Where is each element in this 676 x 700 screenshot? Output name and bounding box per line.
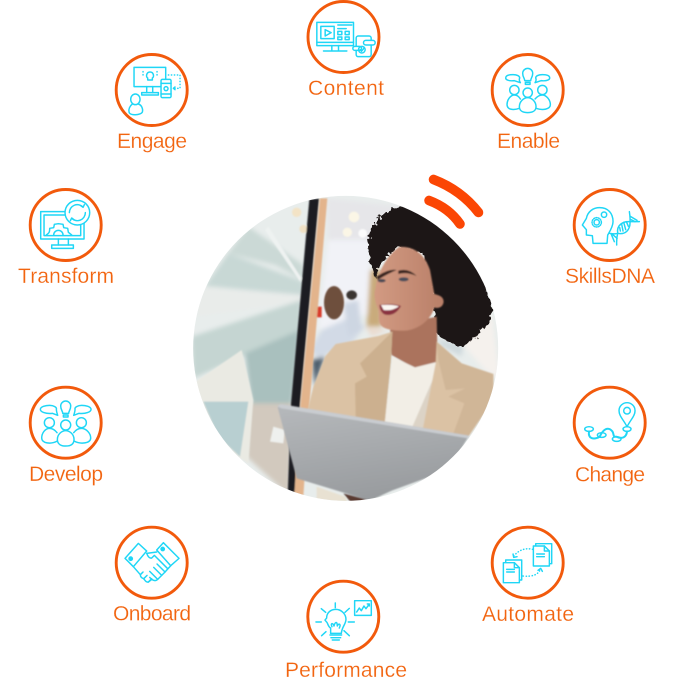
icon: idea bulb and chart	[316, 601, 371, 640]
label: Performance	[285, 659, 407, 682]
icon: monitor with gear and refresh	[41, 200, 90, 248]
item: SkillsDNA	[565, 190, 655, 288]
item: Automate	[482, 527, 574, 626]
item: Engage	[116, 54, 187, 153]
icon: team with idea	[506, 68, 550, 113]
item: Develop	[29, 387, 103, 486]
neck	[390, 317, 438, 368]
blurred office background	[193, 228, 497, 490]
item: Content	[308, 2, 384, 100]
label: Change	[575, 464, 645, 486]
icon: team with idea	[40, 401, 91, 446]
item: Onboard	[113, 527, 191, 626]
icon: head with gear and DNA helix	[582, 208, 639, 245]
item: Transform	[18, 190, 114, 288]
label: Onboard	[113, 603, 191, 626]
label: Automate	[482, 603, 574, 626]
label: Engage	[117, 130, 187, 153]
jacket	[309, 331, 465, 434]
label: Enable	[497, 130, 560, 153]
hair	[368, 206, 492, 346]
accent arcs	[429, 180, 478, 224]
label: Develop	[29, 463, 103, 486]
face	[375, 247, 444, 331]
label: Transform	[18, 265, 114, 288]
icon: route with location pin	[585, 403, 635, 441]
central photo: woman with laptop	[185, 190, 505, 510]
shirt	[384, 357, 436, 432]
item: Enable	[492, 54, 563, 153]
label: SkillsDNA	[565, 265, 655, 288]
item: Change	[574, 387, 645, 486]
label: Content	[308, 77, 384, 100]
icon: documents exchange	[503, 544, 552, 583]
laptop	[278, 404, 469, 501]
icon: devices with user	[129, 67, 180, 115]
icon: monitor and phone	[317, 22, 375, 57]
icon: handshake	[125, 543, 179, 582]
item: Performance	[285, 581, 407, 682]
